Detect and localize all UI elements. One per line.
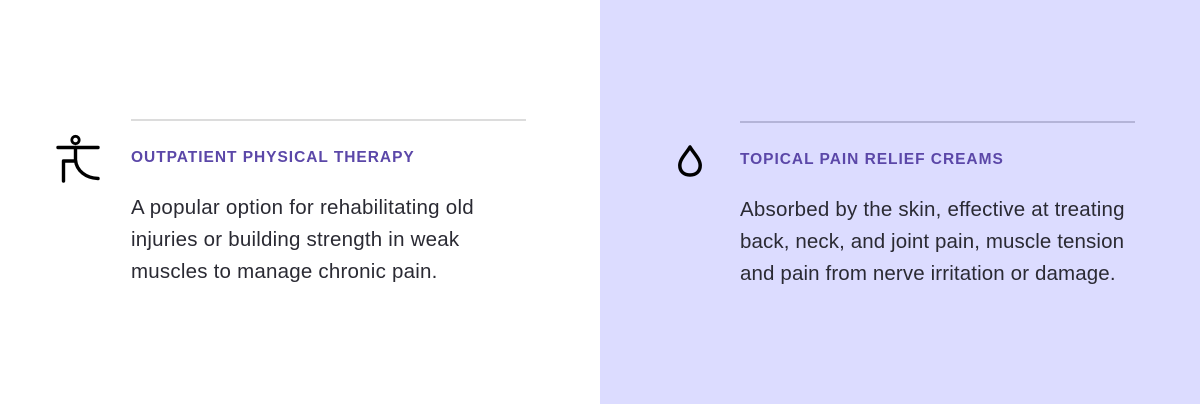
heading: topical pain relief creams: TOPICAL PAIN RELIEF CREAMS bbox=[740, 151, 1004, 168]
text: topical description: and pain from nerve irritation or damage. bbox=[740, 262, 1116, 285]
icon: droplet bbox=[678, 145, 702, 177]
text: outpatient description: muscles to manage chronic pain. bbox=[131, 260, 438, 283]
panel: outpatient physical therapy bbox=[56, 119, 526, 283]
text: outpatient description: injuries or building strength in weak bbox=[131, 228, 459, 251]
text: topical description: Absorbed by the skin, effective at treating bbox=[740, 198, 1125, 221]
text: topical description bbox=[740, 198, 1125, 285]
panel: topical pain relief creams bbox=[678, 121, 1135, 285]
text: outpatient description: A popular option for rehabilitating old bbox=[131, 196, 474, 219]
text: outpatient description bbox=[131, 196, 474, 283]
heading: outpatient physical therapy: OUTPATIENT PHYSICAL THERAPY bbox=[131, 149, 415, 166]
text: topical description: back, neck, and joint pain, muscle tension bbox=[740, 230, 1124, 253]
icon: yoga warrior pose figure bbox=[56, 134, 100, 183]
panel: right background bbox=[600, 0, 1200, 404]
